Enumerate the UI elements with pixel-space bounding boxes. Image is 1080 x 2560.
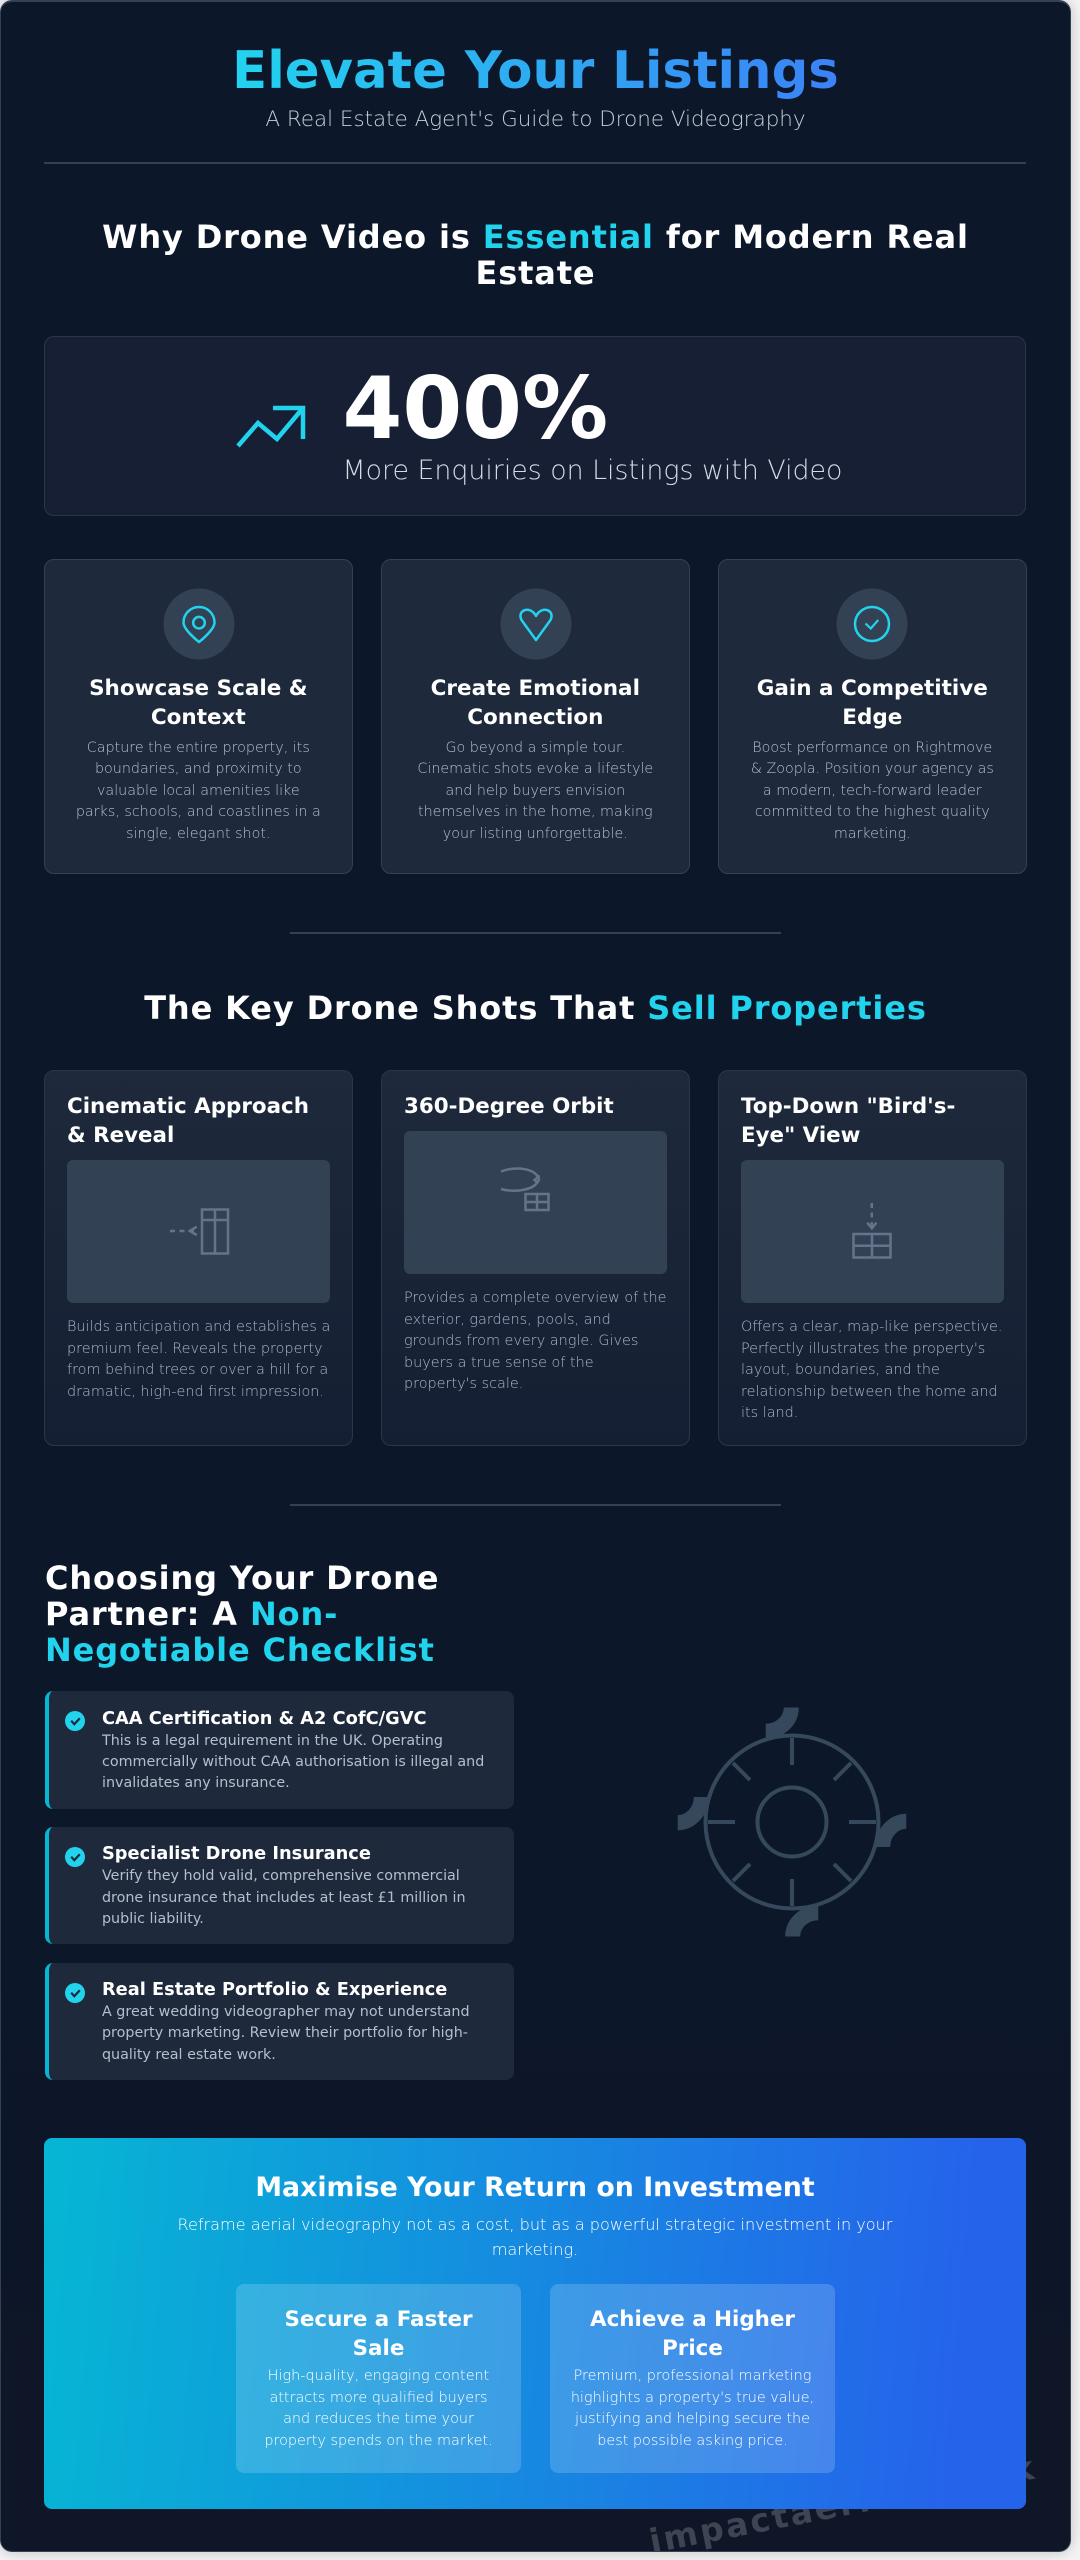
item text: drone insurance that includes at least £1 million in	[102, 1890, 466, 1906]
box text	[571, 2368, 814, 2449]
card text: boundaries, and proximity to	[95, 761, 302, 777]
card text: & Zoopla. Position your agency as	[751, 761, 994, 777]
stat label: More Enquiries on Listings with Video	[342, 455, 842, 486]
card text: committed to the highest quality	[755, 804, 990, 820]
shot text: grounds from every angle. Gives	[404, 1333, 638, 1349]
item text	[102, 2004, 470, 2063]
box title	[284, 2307, 472, 2361]
item text: A great wedding videographer may not understand	[102, 2004, 470, 2020]
shot text: layout, boundaries, and the	[741, 1362, 940, 1378]
checklist item: certification	[45, 1691, 514, 1808]
box text: High-quality, engaging content	[268, 2368, 489, 2384]
card title	[757, 676, 988, 730]
cta text	[178, 2215, 892, 2259]
card text: Capture the entire property, its	[87, 740, 310, 756]
heading: checklist	[45, 1559, 439, 1669]
shot title	[67, 1094, 309, 1148]
heading: key drone shots: The Key Drone Shots That Sell Properties	[144, 988, 927, 1026]
icon: check	[65, 1711, 85, 1731]
card title: Connection	[467, 705, 603, 730]
illustration: drone propeller	[678, 1708, 906, 1936]
icon: check	[65, 1983, 85, 2003]
title: Elevate Your Listings	[232, 41, 839, 101]
card text: themselves in the home, making	[418, 804, 653, 820]
cta heading: Maximise Your Return on Investment	[255, 2172, 815, 2203]
panel: emotional connection	[381, 559, 690, 874]
checklist item: insurance	[45, 1827, 514, 1944]
shot title: 360-Degree Orbit	[404, 1094, 614, 1119]
shot title: Cinematic Approach	[67, 1094, 309, 1119]
panel: 360 orbit	[381, 1070, 690, 1446]
shot text	[741, 1319, 1002, 1421]
item text	[102, 1732, 484, 1791]
card text: parks, schools, and coastlines in a	[76, 804, 321, 820]
shot text	[67, 1319, 330, 1400]
panel: cinematic approach	[44, 1070, 353, 1446]
shot title: Top-Down "Bird's-	[741, 1094, 955, 1119]
item text: commercially without CAA authorisation is illegal and	[102, 1754, 484, 1770]
item text: This is a legal requirement in the UK. Operating	[102, 1732, 443, 1748]
checklist item: portfolio	[45, 1962, 514, 2080]
icon: approach	[170, 1208, 230, 1255]
card text: your listing unforgettable.	[443, 826, 628, 842]
card text	[417, 740, 653, 842]
cta text: Reframe aerial videography not as a cost, but as a powerful strategic investment in your	[178, 2215, 892, 2234]
shot text: property's scale.	[404, 1376, 523, 1392]
box title: Achieve a Higher	[590, 2307, 795, 2332]
heading: checklist: Choosing Your Drone	[45, 1559, 439, 1597]
item text: quality real estate work.	[102, 2047, 276, 2063]
card text: marketing.	[834, 826, 911, 842]
shot text: Offers a clear, map-like perspective.	[741, 1319, 1002, 1335]
box text: attracts more qualified buyers	[269, 2390, 488, 2406]
card text: Cinematic shots evoke a lifestyle	[417, 761, 653, 777]
box text: Premium, professional marketing	[574, 2368, 811, 2384]
shot text: Builds anticipation and establishes a	[67, 1319, 330, 1335]
heading: why drone video: Estate	[475, 254, 596, 292]
box: higher price	[550, 2284, 835, 2473]
shot title	[741, 1094, 955, 1148]
subtitle: A Real Estate Agent's Guide to Drone Videography	[265, 106, 806, 132]
panel: top-down view	[718, 1070, 1027, 1446]
shot text: premium feel. Reveals the property	[67, 1340, 322, 1356]
stat value: 400%	[342, 359, 608, 459]
card text: and help buyers envision	[445, 782, 625, 798]
card title	[431, 676, 640, 730]
box text: highlights a property's true value,	[571, 2390, 814, 2406]
shot text: Provides a complete overview of the	[404, 1290, 666, 1306]
shot text: dramatic, high-end first impression.	[67, 1384, 324, 1400]
heading: checklist: Partner: A Non-	[45, 1595, 338, 1633]
box text: justifying and helping secure the	[575, 2411, 810, 2427]
card text: Go beyond a simple tour.	[445, 740, 625, 756]
item text	[102, 1868, 466, 1927]
card title: Showcase Scale &	[89, 676, 308, 701]
box title: Sale	[353, 2336, 404, 2361]
card title: Create Emotional	[431, 676, 640, 701]
box text: property spends on the market.	[264, 2433, 493, 2449]
card text: valuable local amenities like	[97, 782, 300, 798]
heading: why drone video	[102, 218, 969, 292]
item text: invalidates any insurance.	[102, 1775, 290, 1791]
card title: Context	[151, 705, 246, 730]
panel: headline stat	[44, 336, 1026, 516]
icon: check	[65, 1847, 85, 1867]
item text: Verify they hold valid, comprehensive commercial	[102, 1868, 460, 1884]
shot text: buyers a true sense of the	[404, 1354, 594, 1370]
box title: Price	[662, 2336, 723, 2361]
heading: checklist: Negotiable Checklist	[45, 1631, 435, 1669]
shot text: relationship between the home and	[741, 1384, 998, 1400]
icon: heart	[500, 588, 572, 660]
card title: Gain a Competitive	[757, 676, 988, 701]
shot text: exterior, gardens, pools, and	[404, 1312, 611, 1328]
icon: orbit	[500, 1167, 550, 1212]
shot text: its land.	[741, 1405, 798, 1421]
item text: property marketing. Review their portfolio for high-	[102, 2025, 468, 2041]
shot text: Perfectly illustrates the property's	[741, 1340, 985, 1356]
heading: why drone video: Why Drone Video is Essential for Modern Real	[102, 218, 969, 256]
box title: Secure a Faster	[284, 2307, 472, 2332]
box text: and reduces the time your	[283, 2411, 474, 2427]
card text: a modern, tech-forward leader	[763, 782, 982, 798]
item text: public liability.	[102, 1911, 204, 1927]
cta text: marketing.	[492, 2240, 578, 2259]
icon: check circle	[836, 588, 908, 660]
box text	[264, 2368, 493, 2449]
shot title: & Reveal	[67, 1123, 174, 1148]
icon: trend arrow	[236, 406, 306, 448]
shot illustration	[404, 1131, 667, 1274]
icon: location pin	[164, 588, 234, 660]
panel: competitive edge	[718, 559, 1027, 874]
card text	[751, 740, 994, 842]
item title: Specialist Drone Insurance	[102, 1843, 371, 1864]
panel: return on investment	[44, 2138, 1026, 2509]
card text: Boost performance on Rightmove	[752, 740, 992, 756]
shot title: Eye" View	[741, 1123, 860, 1148]
item title: Real Estate Portfolio & Experience	[102, 1979, 447, 2000]
shot illustration	[67, 1160, 330, 1303]
item title: CAA Certification & A2 CofC/GVC	[102, 1708, 427, 1728]
card text: single, elegant shot.	[126, 826, 271, 842]
box title	[590, 2307, 795, 2361]
card title: Edge	[842, 705, 902, 730]
shot text	[404, 1290, 666, 1392]
shot text: from behind trees or over a hill for a	[67, 1362, 328, 1378]
box: faster sale	[236, 2284, 521, 2473]
box text: best possible asking price.	[597, 2433, 788, 2449]
icon: top-down	[852, 1203, 892, 1259]
shot illustration	[741, 1160, 1004, 1303]
card text	[76, 740, 321, 842]
card title	[89, 676, 308, 730]
panel: showcase scale	[44, 559, 353, 874]
